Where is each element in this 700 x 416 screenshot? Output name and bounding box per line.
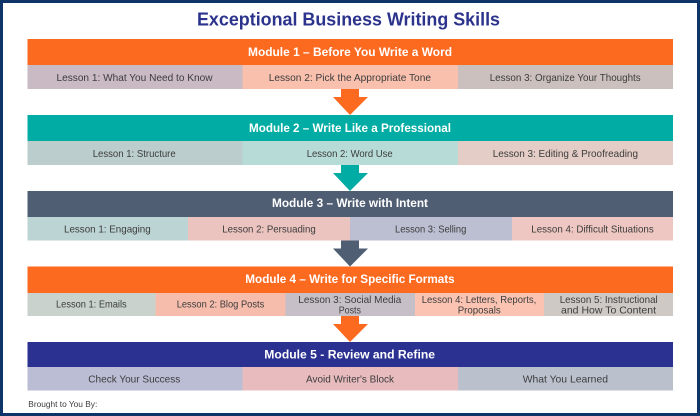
arrow: module 2 to 3 — [333, 165, 368, 191]
module 1 lesson 2 — [242, 65, 458, 89]
module 4 lesson 3: Lesson 3: Social Media — [298, 295, 402, 306]
panel: module 3 — [28, 191, 673, 240]
module 3 lesson 4: Lesson 4: Difficult Situations — [531, 224, 654, 236]
module 3 lesson 1: Lesson 1: Engaging — [64, 224, 151, 236]
module 3 lesson 3: Lesson 3: Selling — [395, 224, 466, 236]
module 3 header: Module 3 – Write with Intent — [272, 196, 428, 210]
module 1 lesson 1: Lesson 1: What You Need to Know — [56, 73, 213, 84]
module 4 lesson 4: Lesson 4: Letters, Reports, — [422, 295, 536, 306]
module 3 lesson 2: Lesson 2: Persuading — [222, 224, 316, 236]
module 3 lesson 2 — [188, 217, 350, 240]
module 5 lesson 2: Avoid Writer's Block — [306, 374, 395, 386]
module 1 header: Module 1 – Before You Write a Word — [248, 45, 452, 59]
module 1 lesson 3: Lesson 3: Organize Your Thoughts — [490, 73, 641, 84]
module 4 lesson 2 — [156, 293, 286, 316]
module 3 lesson 4 — [512, 217, 673, 240]
module 4 lesson 1: Lesson 1: Emails — [56, 300, 127, 310]
module 3 lesson 3 — [350, 217, 512, 240]
module 2 lesson 2 — [242, 141, 458, 165]
panel: module 4 — [28, 266, 673, 316]
module 5 header — [28, 342, 673, 367]
module 4 header: Module 4 – Write for Specific Formats — [245, 272, 455, 286]
module 5 header: Module 5 - Review and Refine — [264, 348, 435, 362]
module 2 header — [28, 115, 673, 141]
module 1 lesson 1 — [28, 65, 242, 89]
arrow: module 3 to 4 — [333, 240, 368, 266]
module 5 lesson 3 — [458, 367, 673, 390]
module 2 lesson 1 — [28, 141, 242, 165]
module 5 lesson 1 — [28, 367, 242, 390]
module 1 lesson 3 — [458, 65, 673, 89]
module 5 lesson 1: Check Your Success — [88, 374, 180, 386]
arrow: module 4 to 5 — [333, 316, 368, 342]
module 4 header — [28, 266, 673, 293]
module 4 lesson 5 — [544, 293, 673, 316]
module 4 lesson 3: Posts — [339, 305, 361, 316]
footer credit: Brought to You By: — [28, 400, 97, 409]
module 5 lesson 3: What You Learned — [523, 374, 608, 386]
module 2 lesson 1: Lesson 1: Structure — [93, 149, 176, 160]
panel: module 2 — [28, 115, 673, 165]
module 4 lesson 4 — [415, 293, 544, 316]
module 5 lesson 2 — [242, 367, 458, 390]
module 3 header — [28, 191, 673, 217]
module 4 lesson 1 — [28, 293, 156, 316]
module 4 lesson 3 — [286, 293, 415, 316]
panel: module 1 — [28, 39, 673, 89]
module 4 lesson 2: Lesson 2: Blog Posts — [177, 300, 264, 310]
panel: module 5 — [28, 342, 673, 390]
module 2 header: Module 2 – Write Like a Professional — [249, 121, 451, 135]
module 1 header — [28, 39, 673, 65]
arrow: module 1 to 2 — [333, 89, 368, 115]
module 4 lesson 5: and How To Content — [561, 305, 656, 316]
module 1 lesson 2: Lesson 2: Pick the Appropriate Tone — [269, 73, 431, 84]
module 4 lesson 5: Lesson 5: Instructional — [560, 295, 658, 306]
module 3 lesson 1 — [28, 217, 188, 240]
module 2 lesson 3 — [458, 141, 673, 165]
module 2 lesson 3: Lesson 3: Editing & Proofreading — [493, 149, 638, 160]
module 2 lesson 2: Lesson 2: Word Use — [307, 149, 393, 160]
title: Exceptional Business Writing Skills — [197, 8, 500, 30]
module 4 lesson 4: Proposals — [458, 305, 501, 316]
